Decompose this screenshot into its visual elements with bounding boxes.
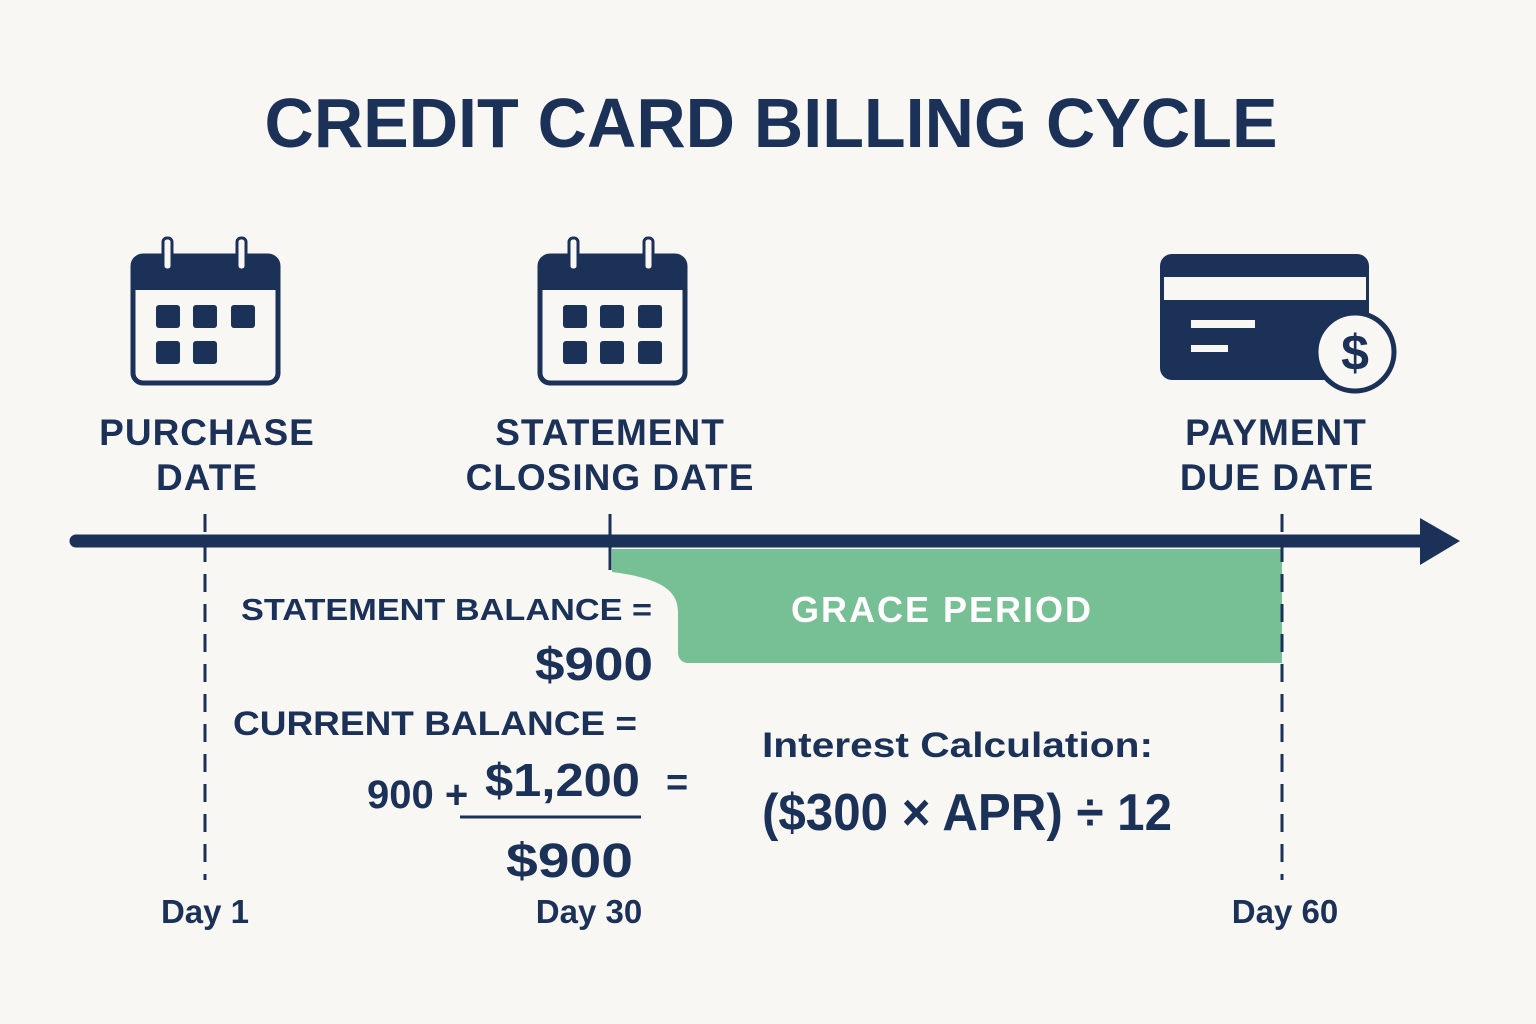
interest calculation: ($300 × APR) ÷ 12 (762, 784, 1172, 842)
current balance calculation: CURRENT BALANCE = (233, 705, 637, 743)
current balance calculation (233, 705, 688, 888)
label: payment due date: DUE DATE (1180, 457, 1374, 498)
statement balance text: $900 (535, 638, 653, 690)
label: statement closing date: STATEMENT (495, 412, 725, 453)
current balance calculation: 900 + (367, 773, 468, 817)
icon: calendar statement (540, 238, 685, 383)
current balance calculation: $1,200 (485, 754, 640, 806)
icon: credit card with dollar (1160, 254, 1394, 391)
label: purchase date (99, 412, 315, 498)
icon: credit card with dollar: $ (1341, 325, 1369, 381)
current balance calculation: $900 (506, 835, 633, 888)
interest calculation: Interest Calculation: (762, 726, 1153, 765)
statement balance text (241, 592, 653, 690)
day labels: Day 60 (1232, 893, 1338, 930)
grace period band: GRACE PERIOD (791, 589, 1093, 630)
timeline arrow (76, 514, 1460, 880)
day labels (161, 893, 1338, 930)
statement balance text: STATEMENT BALANCE = (241, 592, 652, 627)
label: purchase date: DATE (156, 457, 258, 498)
interest calculation (762, 726, 1172, 842)
icon: calendar purchase (133, 238, 278, 383)
current balance calculation: = (666, 762, 688, 804)
label: payment due date: PAYMENT (1185, 412, 1367, 453)
grace period band (612, 549, 1282, 663)
label: payment due date (1180, 412, 1374, 498)
label: purchase date: PURCHASE (99, 412, 315, 453)
title: CREDIT CARD BILLING CYCLE (264, 84, 1278, 162)
label: statement closing date (466, 412, 754, 498)
label: statement closing date: CLOSING DATE (466, 457, 754, 498)
day labels: Day 30 (536, 893, 642, 930)
day labels: Day 1 (161, 893, 249, 930)
